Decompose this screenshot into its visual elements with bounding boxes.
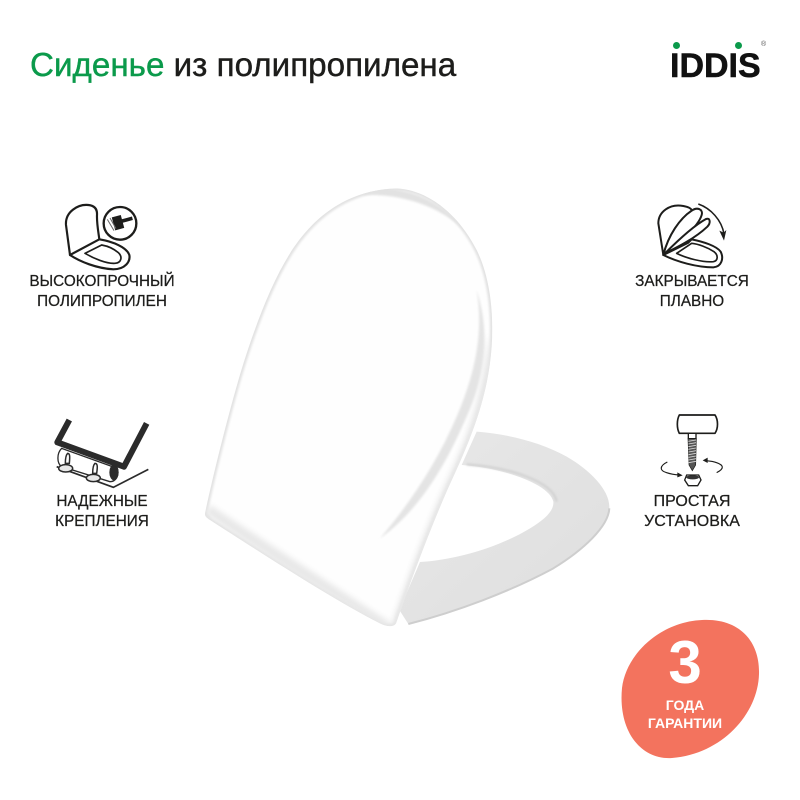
bolts (59, 453, 100, 482)
number 3: 3 (668, 629, 702, 696)
seat ring (399, 432, 609, 624)
logo: IDDIS: ® (761, 41, 766, 48)
label: reliable fastenings (55, 493, 149, 530)
logo: IDDIS: IDDIS (670, 47, 761, 85)
lid frame (57, 420, 147, 467)
label: closes smoothly (635, 273, 749, 310)
warranty text: ГОДА (666, 697, 704, 713)
label: easy installation: УСТАНОВКА (644, 513, 740, 530)
rotation arrows (661, 462, 679, 475)
label: reliable fastenings: НАДЕЖНЫЕ (56, 493, 148, 510)
hammer badge (104, 207, 136, 240)
base plane (57, 467, 148, 487)
icon: soft close (657, 203, 726, 268)
arrow (698, 204, 724, 234)
hinge bar (58, 448, 118, 482)
product photo: toilet seat (205, 188, 610, 626)
icon: hinges (54, 418, 150, 488)
warranty badge (622, 620, 760, 758)
lid outline (66, 205, 99, 255)
seat outline (70, 239, 130, 269)
label: easy installation (644, 493, 740, 530)
label: reliable fastenings: КРЕПЛЕНИЯ (55, 513, 149, 530)
label: high-strength polypropylene: ВЫСОКОПРОЧНЫЙ (29, 273, 175, 290)
icon: screw and nut (660, 414, 723, 486)
seat ring inner edge (467, 464, 557, 502)
label: closes smoothly: ЗАКРЫВАЕТСЯ (635, 273, 749, 290)
lid (205, 188, 492, 626)
label: high-strength polypropylene: ПОЛИПРОПИЛЕН (37, 293, 167, 310)
label: high-strength polypropylene (29, 272, 175, 310)
title: Сиденье из полипропилена (30, 47, 456, 84)
label: easy installation: ПРОСТАЯ (654, 493, 730, 510)
warranty text (648, 697, 722, 731)
lid soft edge (205, 188, 492, 626)
badge blob (622, 620, 760, 758)
lid shading (369, 190, 454, 222)
icon: seat with hammer (64, 204, 138, 270)
label: closes smoothly: ПЛАВНО (660, 293, 724, 310)
warranty text: ГАРАНТИИ (648, 715, 722, 731)
